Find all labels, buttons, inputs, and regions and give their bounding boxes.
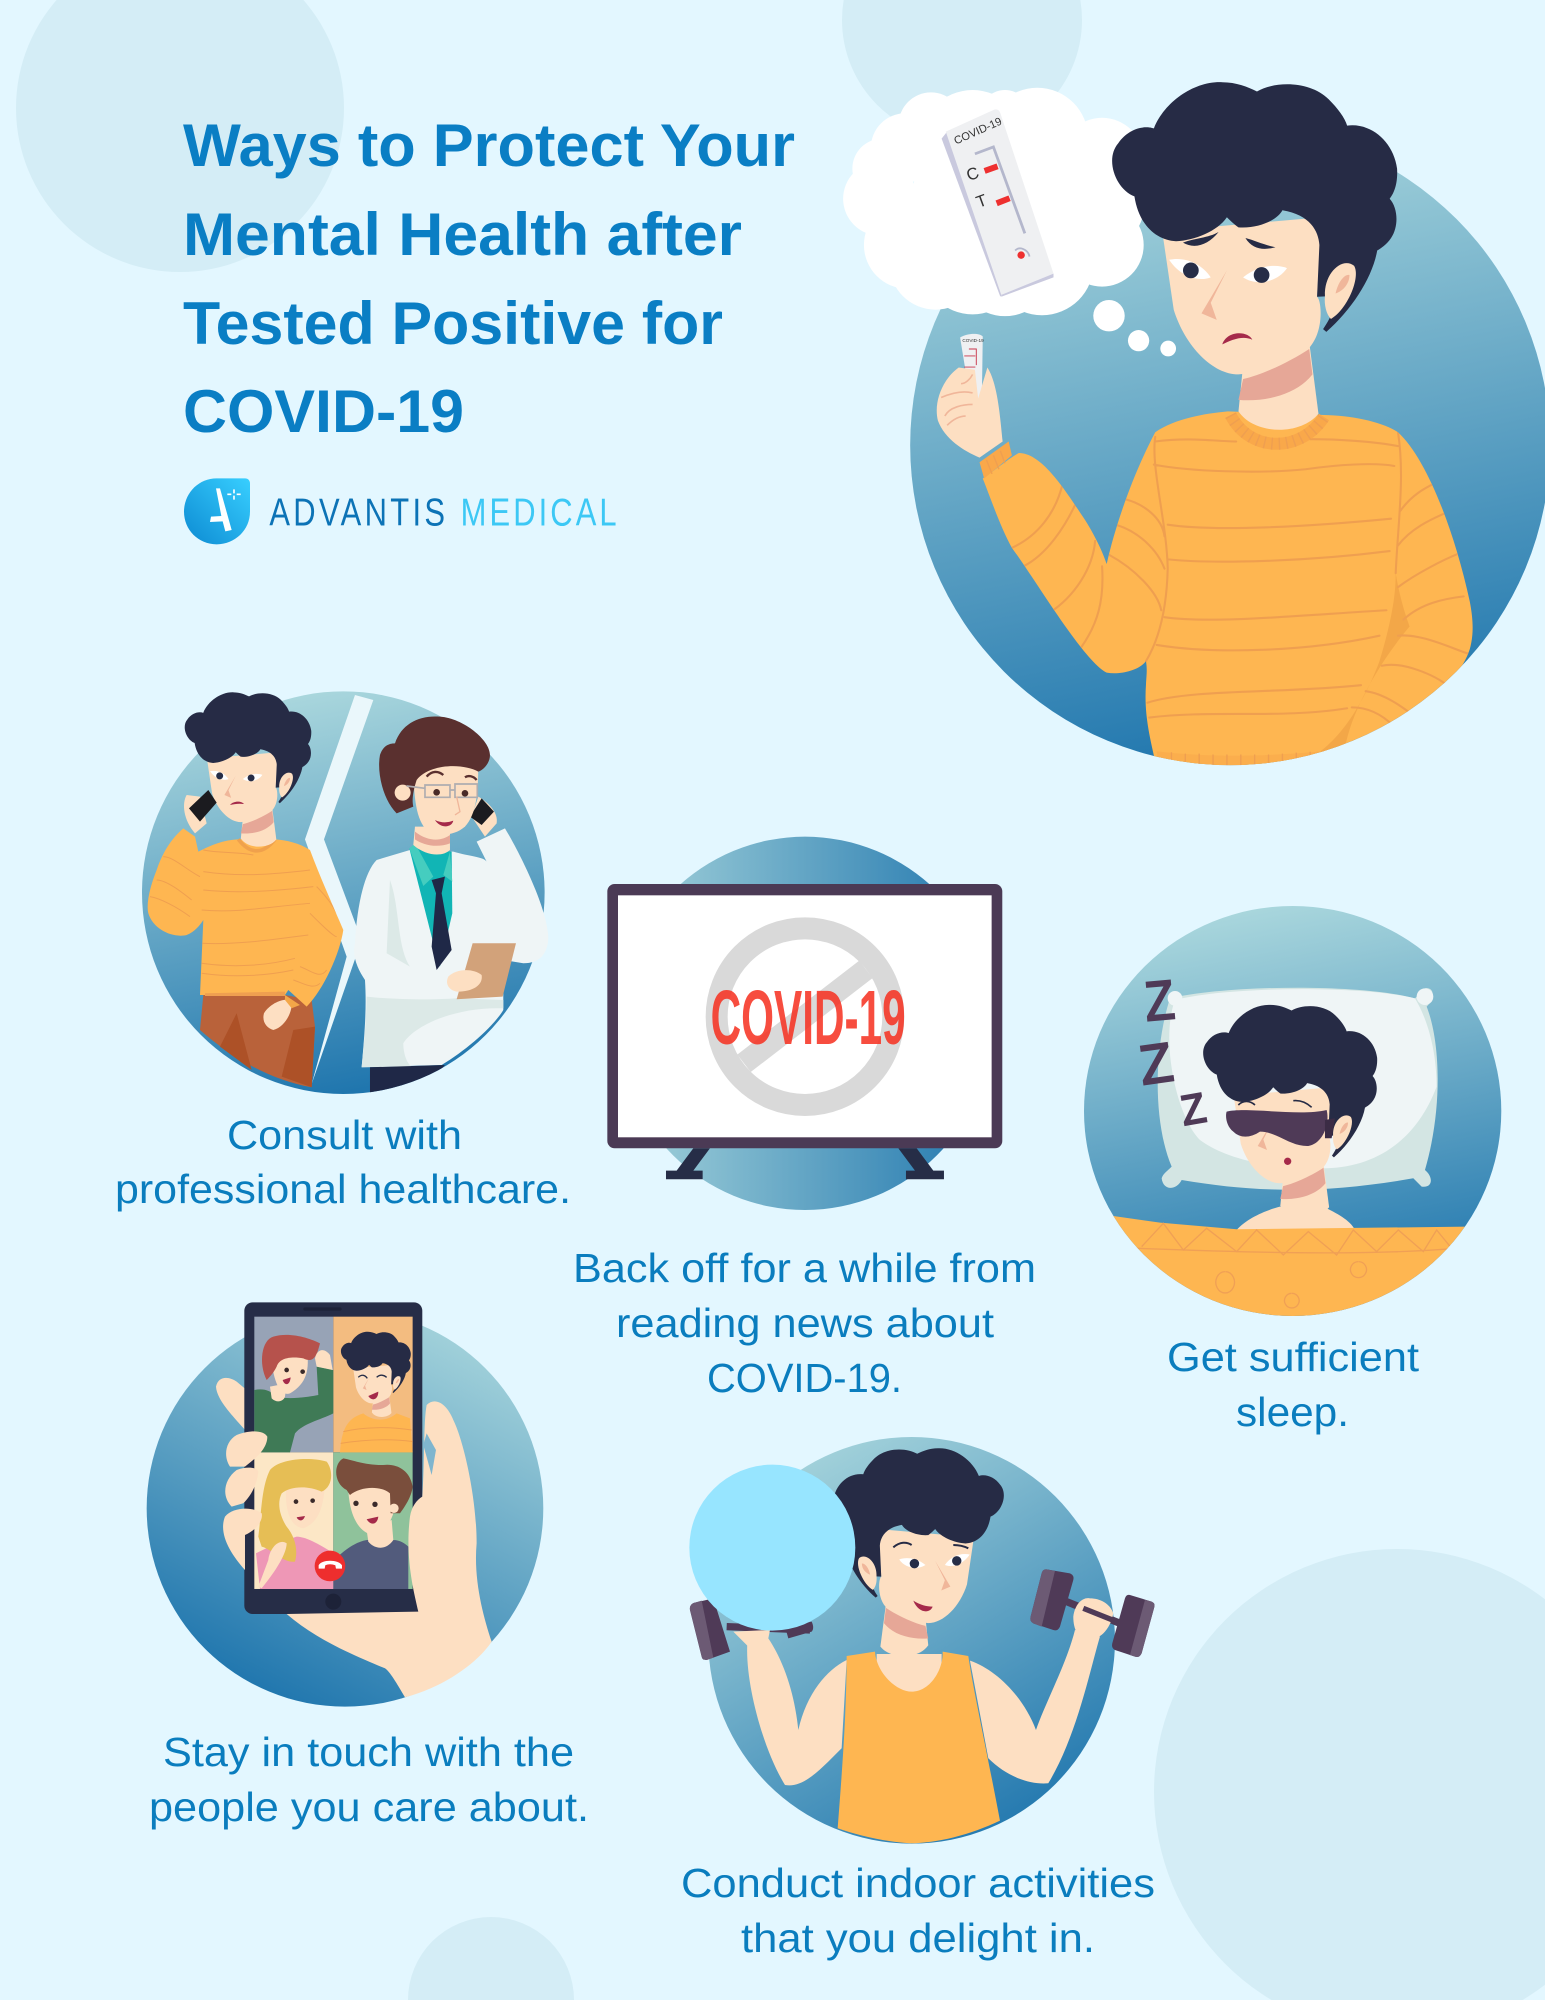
smiling head	[833, 1448, 1004, 1656]
thought cloud with test kit: C	[964, 163, 982, 185]
snoring letters: Z	[1142, 968, 1177, 1033]
doctor with clipboard	[354, 716, 548, 1093]
friend: curly hair	[340, 1332, 413, 1452]
blanket	[1114, 1216, 1465, 1316]
panel: back off from news	[607, 837, 1002, 1210]
pillow	[1158, 988, 1438, 1190]
caption: sleep: sleep.	[1236, 1389, 1349, 1435]
caption: indoor activities: Conduct indoor activities	[681, 1860, 1155, 1906]
hand holding phone	[223, 1401, 492, 1697]
activity gradient circle	[708, 1437, 1115, 1844]
caption: sleep: Get sufficient	[1167, 1334, 1420, 1380]
caption: indoor activities: that you delight in.	[741, 1915, 1095, 1961]
arms	[733, 1598, 1113, 1785]
dumbbell grip	[1083, 1608, 1117, 1622]
hand holding test kit	[937, 334, 1012, 478]
smartphone	[244, 1302, 422, 1614]
finger behind phone	[216, 1378, 247, 1432]
snoring letters	[1136, 968, 1209, 1134]
caption: stay in touch	[149, 1729, 589, 1830]
hero gradient circle	[910, 125, 1545, 765]
title: Tested Positive for	[183, 290, 723, 357]
TV legs	[666, 1148, 944, 1179]
icon: logo drop	[184, 478, 250, 544]
caption: consult: Consult with	[227, 1112, 462, 1158]
panel: sufficient sleep	[1077, 906, 1510, 1323]
icon: end call button	[315, 1551, 345, 1581]
snoring letters: Z	[1177, 1084, 1209, 1134]
logo wordmark: ADVANTIS	[269, 491, 445, 534]
caption: news: COVID-19.	[707, 1355, 902, 1401]
caption: news	[573, 1245, 1036, 1401]
sleeping head with eye mask	[1203, 1005, 1377, 1230]
dumbbells	[690, 1569, 1155, 1660]
news gradient circle	[618, 837, 992, 1210]
title: Mental Health after	[183, 201, 742, 268]
title: Ways to Protect Your	[183, 112, 795, 179]
thought cloud with test kit: T	[973, 190, 990, 212]
tank top	[838, 1652, 1000, 1843]
caption: indoor activities	[681, 1860, 1155, 1961]
lightning divider	[305, 695, 373, 1084]
title	[183, 112, 795, 445]
thought cloud with test kit	[843, 88, 1176, 356]
worried face	[1112, 82, 1397, 430]
sleep gradient circle	[1084, 906, 1501, 1316]
caption: news: reading news about	[616, 1300, 995, 1346]
caption: consult: professional healthcare.	[115, 1166, 571, 1212]
COVID-19 on screen: COVID-19	[711, 975, 906, 1061]
sweater	[983, 411, 1473, 772]
caption: stay in touch: Stay in touch with the	[163, 1729, 574, 1775]
prohibited sign	[717, 928, 893, 1105]
touch gradient circle	[147, 1310, 543, 1707]
caption: sleep	[1167, 1334, 1420, 1435]
patient on the phone	[148, 692, 343, 1087]
snoring letters: Z	[1136, 1031, 1177, 1097]
panel: consult with healthcare	[142, 691, 548, 1094]
title: COVID-19	[183, 378, 464, 445]
panel: stay in touch	[147, 1302, 543, 1707]
caption: stay in touch: people you care about.	[149, 1784, 589, 1830]
friend: blonde hair	[256, 1459, 333, 1589]
friend: red hair	[254, 1335, 333, 1452]
consult gradient circle	[142, 691, 545, 1094]
blue circle overlay	[689, 1465, 855, 1631]
panel: indoor activities	[689, 1437, 1155, 1844]
thought cloud with test kit: COVID-19	[952, 116, 1004, 147]
logo wordmark: MEDICAL	[461, 491, 617, 534]
TV screen	[618, 895, 992, 1137]
TV frame	[607, 884, 1002, 1148]
logo wordmark	[269, 491, 617, 534]
caption: news: Back off for a while from	[573, 1245, 1036, 1291]
hand holding test kit: COVID-19	[962, 338, 984, 343]
neck opening	[877, 1654, 942, 1698]
logo: Advantis Medical	[184, 478, 617, 544]
friend: brown hair	[333, 1458, 413, 1589]
caption: consult	[115, 1112, 571, 1212]
hero illustration: worried man with positive test	[843, 82, 1545, 772]
